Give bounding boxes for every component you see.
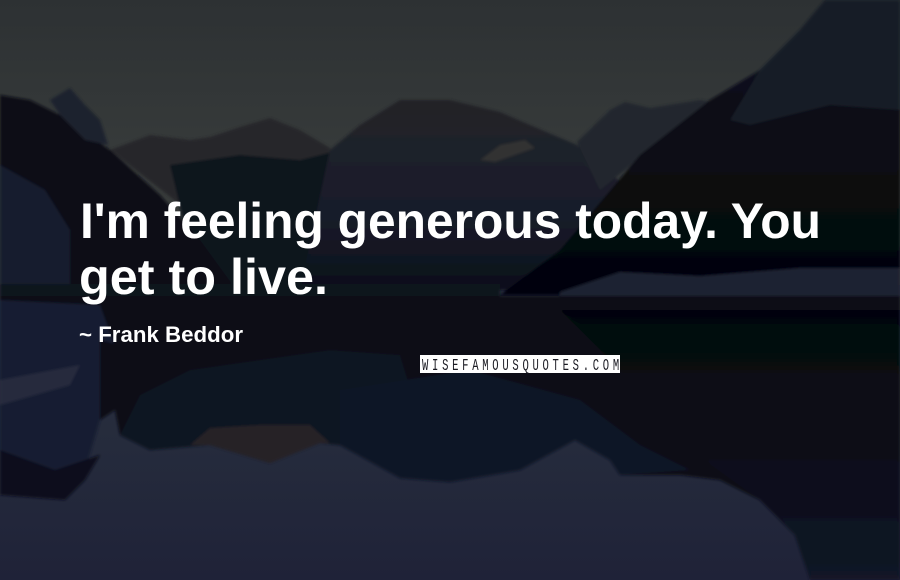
lake water [0, 285, 900, 580]
watermark badge: WISEFAMOUSQUOTES.COM [422, 357, 619, 376]
reflection body [0, 296, 900, 580]
quote text: I'm feeling generous today. You [80, 193, 821, 249]
quote text [79, 193, 821, 305]
sky [0, 0, 900, 300]
shoreline [0, 284, 500, 296]
left shore reflection [0, 300, 120, 495]
quote text: get to live. [79, 249, 328, 305]
author attribution: ~ Frank Beddor [79, 322, 243, 347]
